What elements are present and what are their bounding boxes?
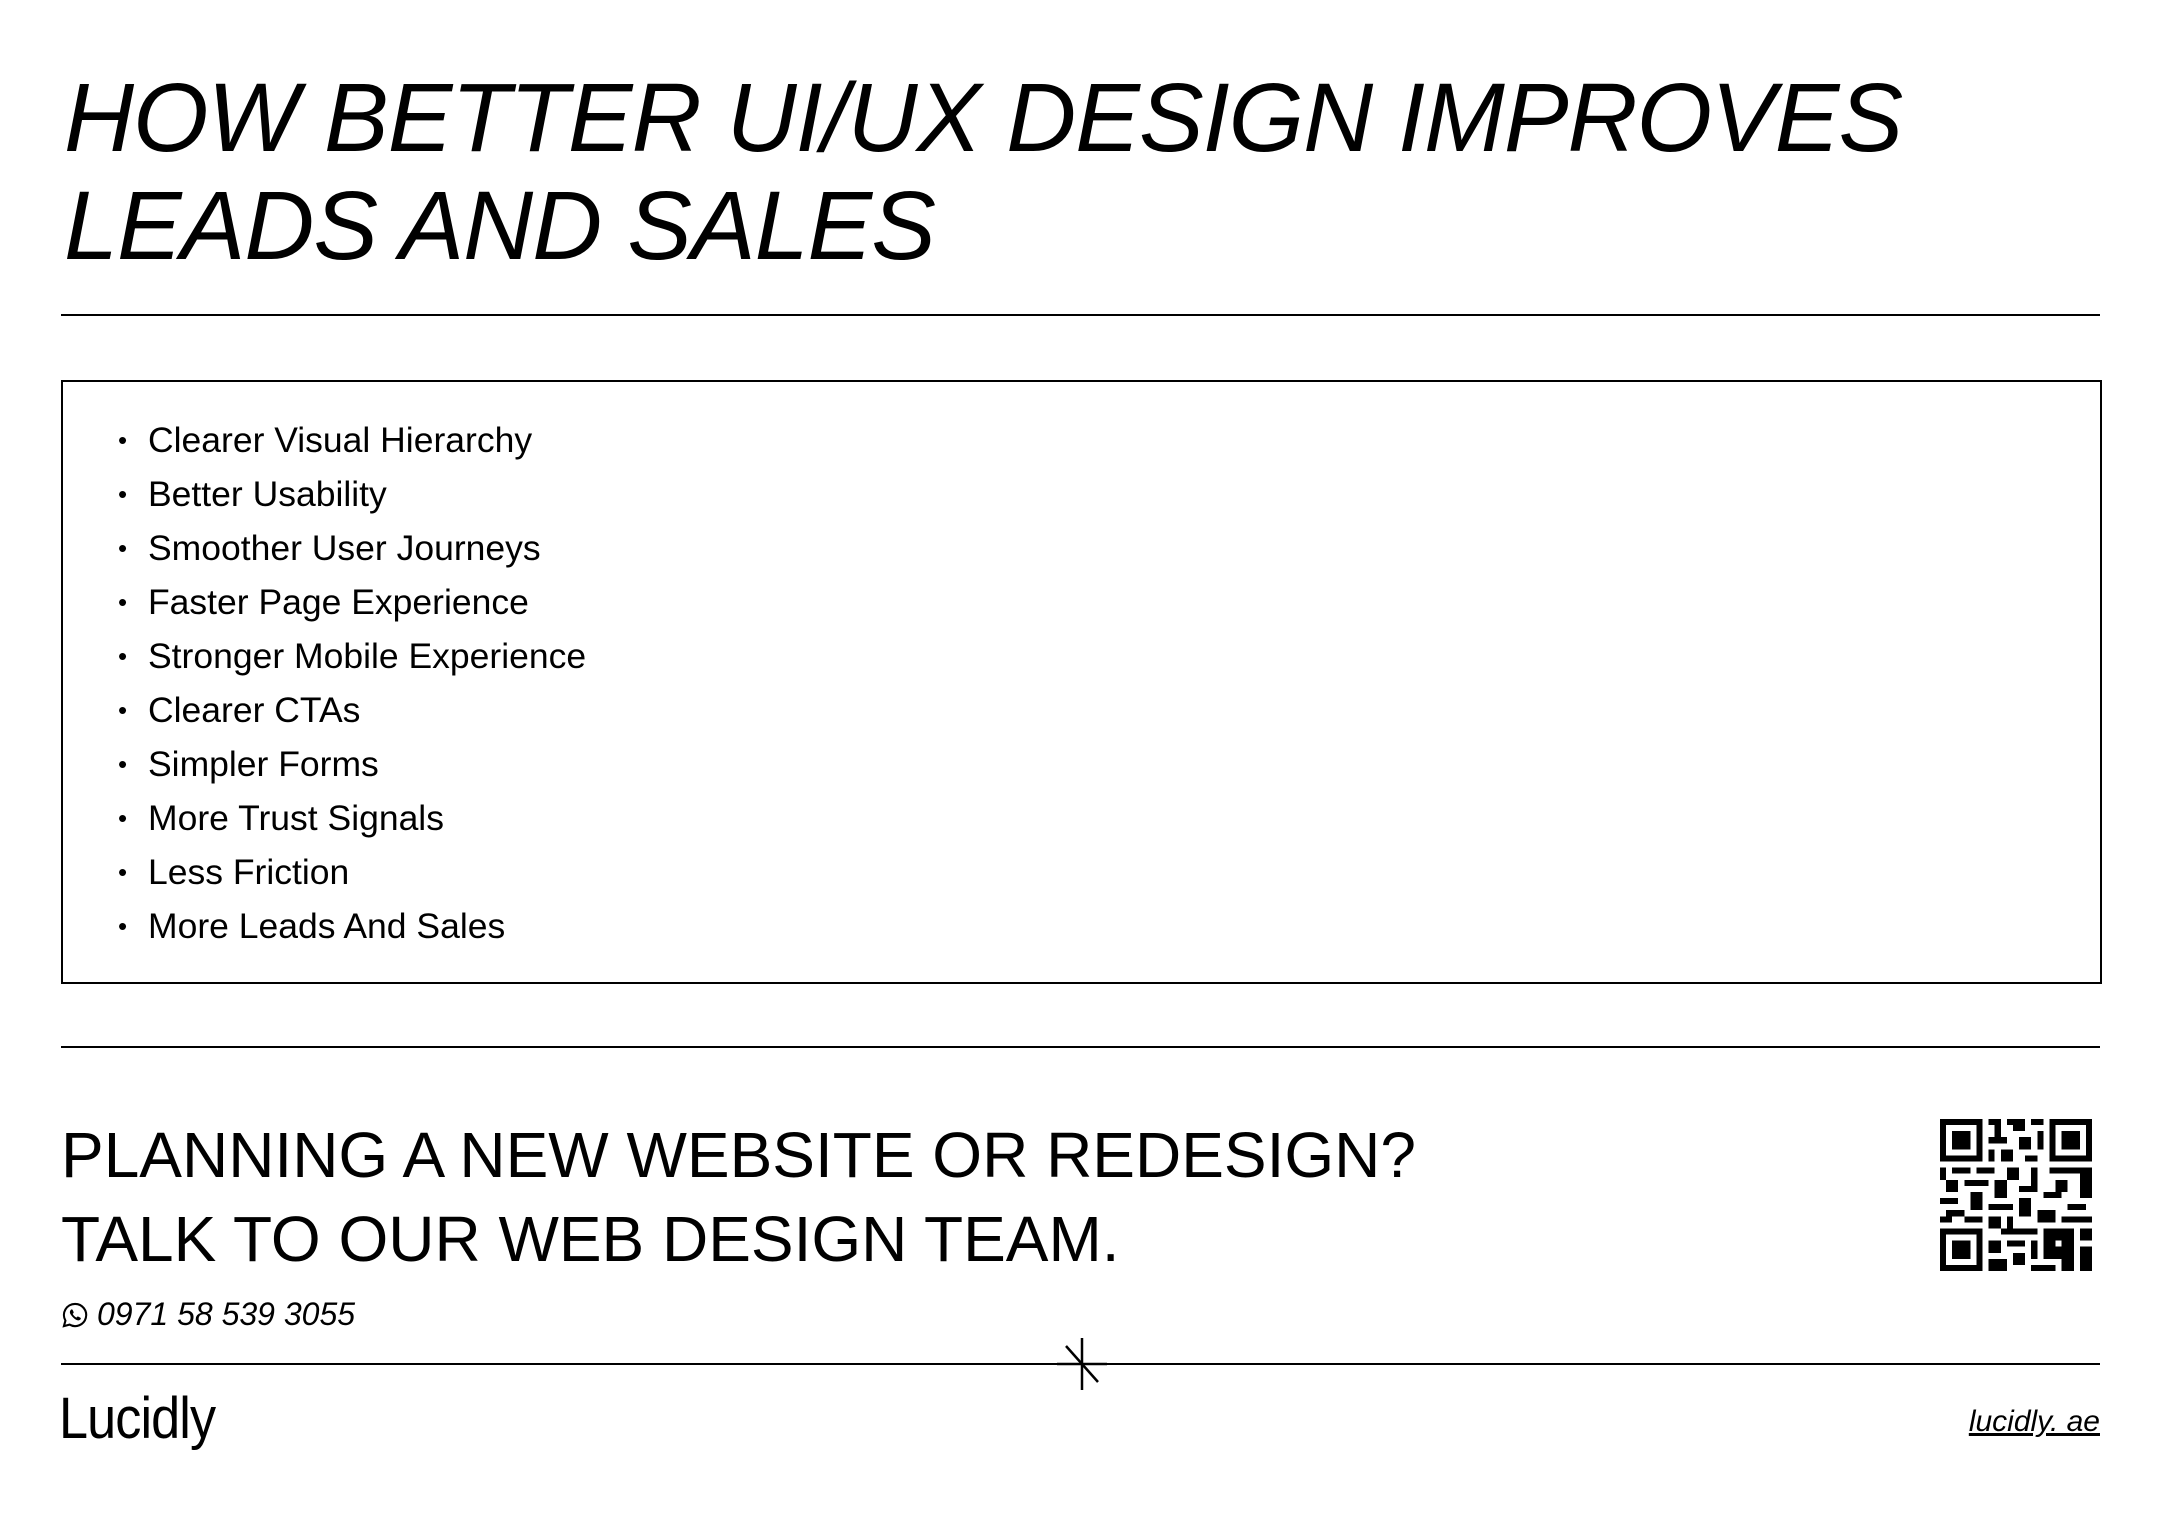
website link: lucidly. ae: [1969, 1405, 2100, 1438]
title: LEADS AND SALES: [64, 171, 935, 280]
phone contact: 0971 58 539 3055: [97, 1296, 355, 1332]
panel: benefits list: Stronger Mobile Experience: [148, 636, 586, 676]
call to action: PLANNING A NEW WEBSITE OR REDESIGN?: [61, 1119, 1416, 1191]
panel: benefits list: [61, 380, 2102, 984]
panel: benefits list: Clearer Visual Hierarchy: [148, 420, 532, 460]
panel: benefits list: Better Usability: [148, 474, 387, 514]
icon: sparkle divider mark: [1057, 1338, 1107, 1390]
panel: benefits list: Smoother User Journeys: [148, 528, 541, 568]
panel: benefits list: More Trust Signals: [148, 798, 444, 838]
panel: benefits list: More Leads And Sales: [148, 906, 505, 946]
logo: Lucidly: [59, 1386, 215, 1451]
call to action: [61, 1119, 1416, 1275]
panel: benefits list: Faster Page Experience: [148, 582, 529, 622]
panel: benefits list: Clearer CTAs: [148, 690, 360, 730]
icon: QR code: [1940, 1119, 2092, 1271]
call to action: TALK TO OUR WEB DESIGN TEAM.: [61, 1203, 1120, 1275]
panel: benefits list: Less Friction: [148, 852, 349, 892]
panel: benefits list: Simpler Forms: [148, 744, 379, 784]
title: HOW BETTER UI/UX DESIGN IMPROVES: [64, 63, 1902, 172]
title: [64, 63, 1902, 280]
